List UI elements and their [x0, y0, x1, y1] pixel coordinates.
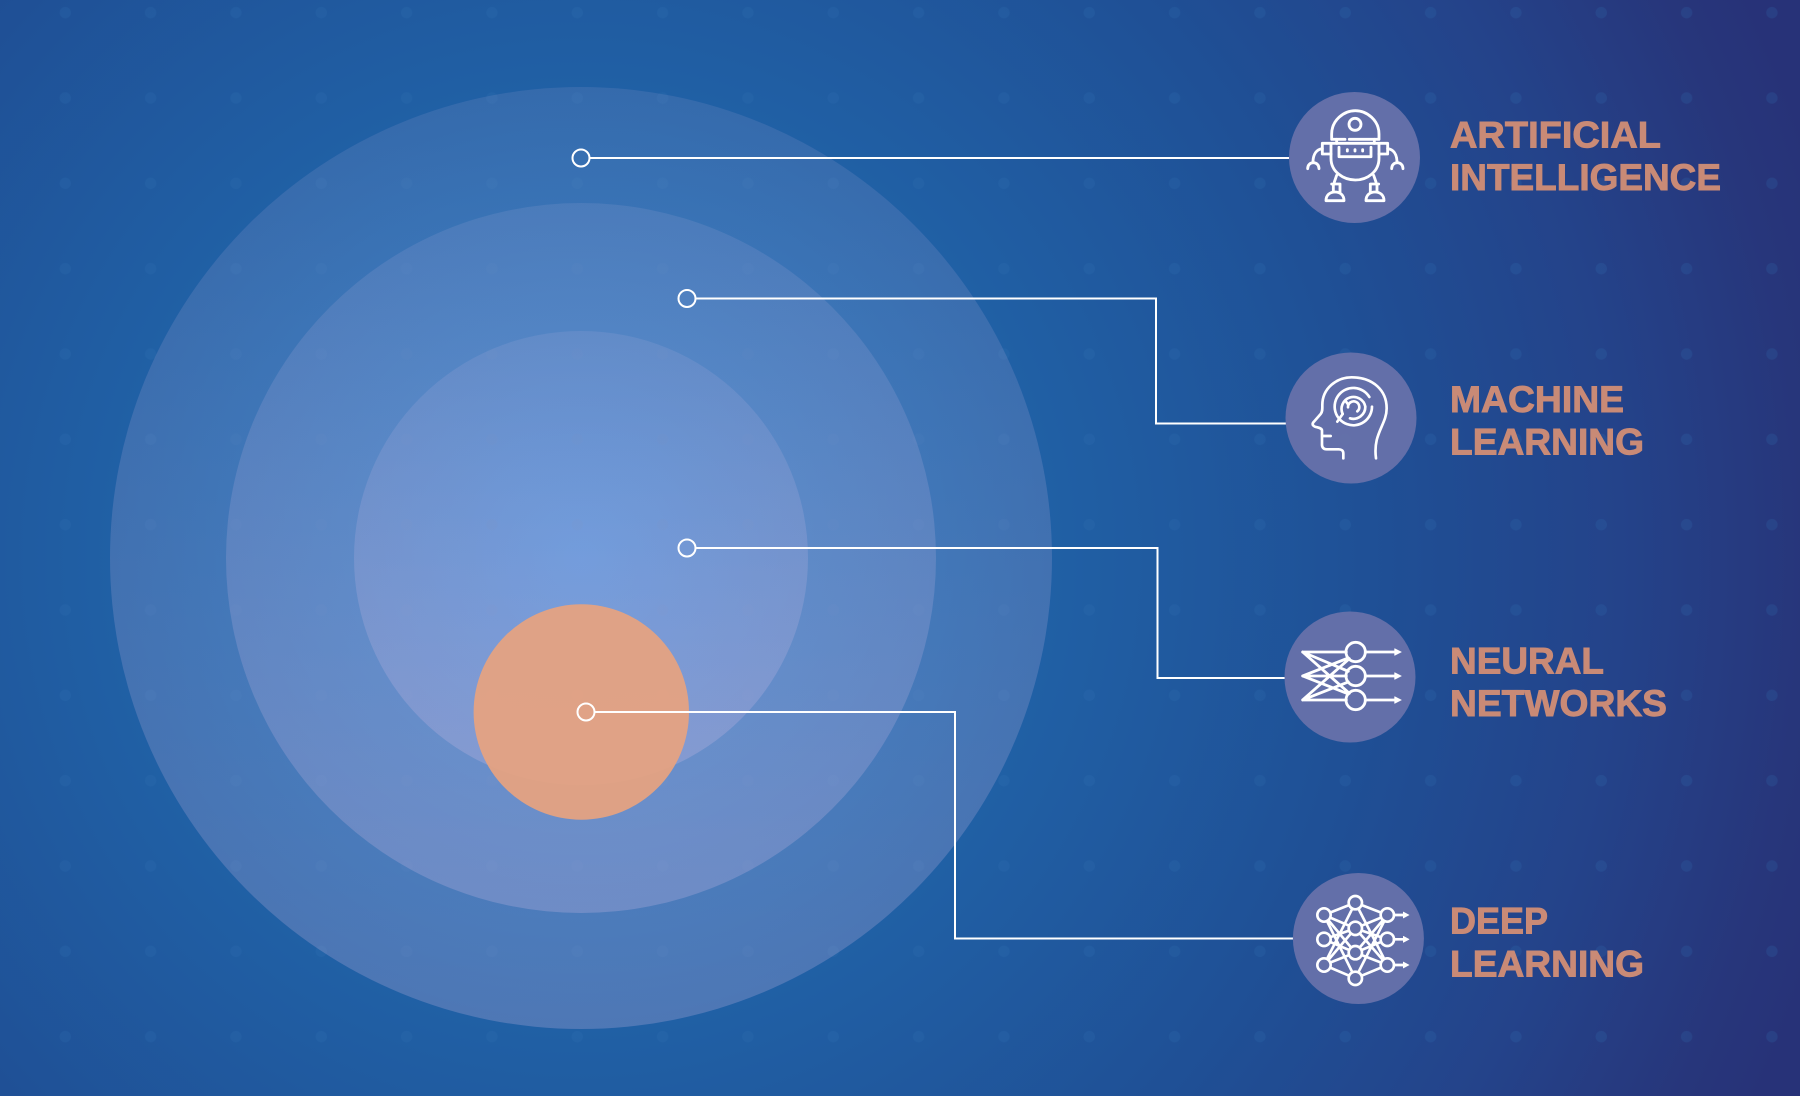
- circle: neural networks: [354, 331, 808, 785]
- label: deep learning: DEEP: [1450, 900, 1548, 941]
- label: machine learning: [1450, 379, 1644, 462]
- connector: machine learning: [678, 290, 1286, 424]
- circle: artificial intelligence: [110, 87, 1052, 1029]
- icon badge: head with maze: [1286, 352, 1416, 484]
- circle: machine learning: [226, 203, 936, 913]
- circle: deep learning: [474, 604, 689, 820]
- label: machine learning: MACHINE: [1450, 379, 1624, 420]
- icon badge: neural network: [1284, 612, 1416, 742]
- connector: artificial intelligence: [572, 150, 1289, 166]
- connector: deep learning: [578, 704, 1293, 938]
- nested circles diagram: [110, 87, 1052, 1029]
- label: deep learning: [1450, 900, 1644, 984]
- label: machine learning: LEARNING: [1450, 422, 1644, 462]
- label: neural networks: NETWORKS: [1450, 683, 1667, 724]
- label: neural networks: [1450, 640, 1667, 724]
- icon badge: deep network: [1293, 873, 1424, 1004]
- connector: neural networks: [678, 540, 1285, 678]
- label: artificial intelligence: ARTIFICIAL: [1450, 114, 1661, 155]
- label: artificial intelligence: INTELLIGENCE: [1450, 157, 1721, 198]
- label: artificial intelligence: [1450, 114, 1721, 198]
- label: deep learning: LEARNING: [1450, 944, 1644, 984]
- label: neural networks: NEURAL: [1450, 640, 1604, 681]
- icon badge: robot: [1289, 92, 1420, 223]
